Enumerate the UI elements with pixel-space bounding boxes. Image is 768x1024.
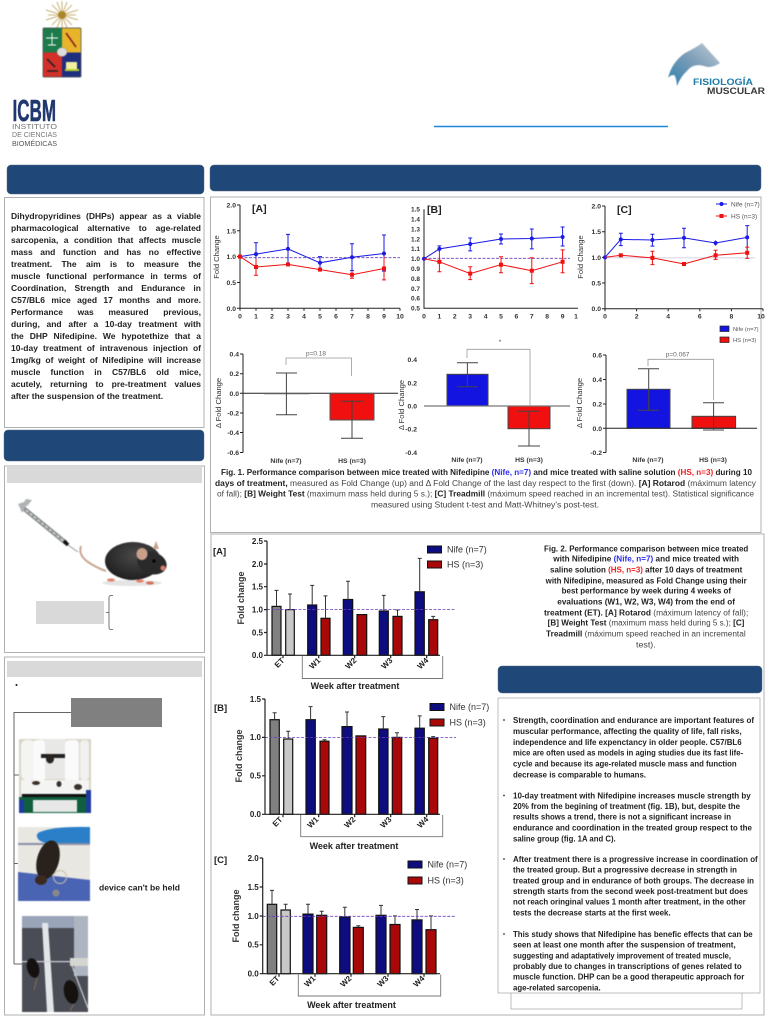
panel: performance tests <box>4 657 204 1015</box>
text block: abstract: pharmacological alternative to age-related <box>11 223 201 233</box>
logo: Fisiologia Muscular: MUSCULAR <box>707 86 765 97</box>
bar chart B: W2 <box>343 815 358 830</box>
bar chart C: [C] <box>214 855 227 866</box>
delta bar chart C: 0.4 <box>593 377 602 384</box>
line chart A: 4 <box>302 314 306 320</box>
bar chart B: W3 <box>379 815 394 830</box>
line chart B: 3 <box>468 314 472 320</box>
bar chart A: W4 <box>416 656 431 671</box>
line chart C: 0.0 <box>592 306 601 313</box>
caption: figure 2: [B] Weight Test (maximum mass held during 5 s.); [C] <box>548 618 745 628</box>
dark gray box <box>71 698 162 727</box>
line chart A: 8 <box>366 314 370 320</box>
conclusion bullet 3: not reach oringinal values 1 month after treatment, in the other <box>513 897 746 907</box>
conclusion bullet 2: 20% from the begining of treatment (fig. 1B), but, despite the <box>513 801 740 811</box>
bar chart C: 2.0 <box>248 854 259 863</box>
line chart A: 1.5 <box>227 228 236 235</box>
conclusion bullet 1: independence and life expenctancy in older people. C57/BL6 <box>513 737 742 747</box>
caption: figure 1 <box>215 468 756 510</box>
caption: figure 2: best performance by week during 4 weeks of <box>562 586 731 596</box>
conclusion bullet 4: This study shows that Nifedipine has benefic effects that can be <box>513 929 753 939</box>
line chart A: 5 <box>318 314 322 320</box>
delta bar chart C: Nife (n=7) <box>632 457 664 464</box>
bar chart C <box>214 854 467 1010</box>
bar chart C: ET <box>268 974 281 988</box>
delta bar chart C: HS (n=3) <box>699 457 727 464</box>
conclusion bullet 2 <box>503 791 752 843</box>
panel: treatment method <box>4 466 204 652</box>
text block: abstract: 10-day treatment of intravenous injection of <box>11 343 201 353</box>
conclusion bullet 4: seen at least one month after the suspension of treatment, <box>513 940 736 950</box>
conclusion bullet 1: Strength, coordination and endurance are important features of <box>513 715 754 725</box>
bar chart C: W2 <box>339 974 354 989</box>
legend: delta bars: Nife (n=7) <box>733 327 759 333</box>
caption: figure 1: measured using Student t-test and Matt-Whitney's post-test. <box>371 500 599 510</box>
photo: treadmill <box>22 916 88 1012</box>
bar chart B <box>214 695 489 851</box>
conclusion bullet 1 <box>503 715 754 779</box>
logo: Fisiologia Muscular <box>668 43 765 97</box>
delta bar chart C: -0.2 <box>590 450 602 457</box>
line chart A: 0 <box>238 314 242 320</box>
delta bar chart B <box>397 339 570 464</box>
heading bar: results <box>210 165 761 191</box>
bar chart A: 0.5 <box>252 628 264 637</box>
bar chart A: W1 <box>308 656 323 671</box>
bar chart A: Fold change <box>236 571 246 625</box>
text block: abstract: after the suspension of the treatment. <box>11 391 163 401</box>
line chart B: 1 <box>574 314 578 320</box>
legend: delta bars: HS (n=3) <box>733 338 756 344</box>
caption: figure 2: with Nifedipine, measured as Fold Change using their <box>545 576 747 586</box>
text block: abstract: acutely, returning to pre-treatment values <box>11 379 201 389</box>
caption: figure 2: evaluations (W1, W2, W3, W4) from the end of <box>557 598 735 606</box>
caption: figure 2: Fig. 2. Performance comparison between mice treated <box>544 544 749 554</box>
line chart C: 4 <box>666 314 670 320</box>
legend: line chart: HS (n=3) <box>731 213 757 220</box>
bar chart C: 1.0 <box>248 912 259 921</box>
logo: ICBM institute: ICBM <box>12 93 56 128</box>
bar chart B: Week after treatment <box>310 841 398 851</box>
line chart B: 1 <box>438 314 442 320</box>
panel: figure 1 <box>210 197 765 532</box>
caption: figure 2: with Nifedipine (Nife, n=7) and mice treated with <box>552 554 739 564</box>
bar chart C: Week after treatment <box>307 1000 396 1010</box>
conclusion bullet 3: strength starts from the second week post-treatment but does <box>513 886 748 896</box>
bar chart B: 1.0 <box>250 733 262 742</box>
delta bar chart A: -0.6 <box>227 450 239 457</box>
line chart C: 0.5 <box>592 280 601 288</box>
delta bar chart B: * <box>499 339 502 346</box>
bar chart C: Nife (n=7) <box>428 860 467 870</box>
bar chart A: 1.5 <box>252 582 264 592</box>
bar chart C: W1 <box>303 974 318 989</box>
text block: abstract: C57/BL6 mice aged 17 months and more. <box>11 295 201 305</box>
line chart B: 1.4 <box>411 216 420 224</box>
text block: abstract: the DHP Nifedipine. We hypotethize that a <box>11 331 201 341</box>
delta bar chart B: 0.4 <box>408 357 417 364</box>
heading bar: conclusions <box>498 666 762 693</box>
conclusion bullet 3 <box>503 854 758 917</box>
caption: figure 1: Fig. 1. Performance comparison between mice treated with Nifedipine (Nife, n=7) and mice treated with saline solution (HS, n=3) during 10 <box>221 468 753 477</box>
text block: abstract: Performance was measured previous, <box>11 307 201 317</box>
line chart B: 2 <box>453 314 457 320</box>
delta bar chart B: Nife (n=7) <box>451 457 483 464</box>
delta bar chart A: 0.0 <box>230 391 239 398</box>
legend: line chart <box>716 201 760 220</box>
bar chart C: 0.5 <box>248 941 259 950</box>
text block: abstract: mass and function and has no effective <box>11 247 201 257</box>
panel: figure 2 <box>211 534 764 1015</box>
text block: abstract: 1mg/kg of weight of Nifedipine will increase <box>11 355 201 365</box>
line chart B: 0.7 <box>411 286 420 293</box>
line chart B: [B] <box>427 204 442 216</box>
line chart C: 10 <box>757 314 765 320</box>
line chart B: 1.3 <box>411 226 420 233</box>
bar chart B: HS (n=3) <box>450 718 486 728</box>
line chart A: 7 <box>350 314 354 320</box>
bar chart B: 0.0 <box>250 810 262 819</box>
bar chart B: 0.5 <box>250 772 262 781</box>
delta bar chart A <box>214 350 398 465</box>
delta bar chart C: 0.0 <box>593 426 602 433</box>
conclusion bullet 3: After treatment there is a progressive increase in coordination of <box>513 854 758 864</box>
conclusion bullet 4: muscle function. DHP can be a good therapeutic approach for <box>513 971 745 981</box>
brace <box>106 596 113 630</box>
bar chart A: 2.5 <box>252 537 264 546</box>
conclusion bullet 4: age-related sarcopenia. <box>513 983 601 993</box>
delta bar chart A: Nife (n=7) <box>270 458 302 465</box>
conclusion bullet 1: mice are often used as models in aging studies due its fast life- <box>513 748 743 758</box>
line chart A: 2.0 <box>227 202 236 210</box>
line chart B: 0.6 <box>411 296 420 303</box>
gray label box <box>36 601 104 624</box>
label: device text: device can't be held <box>99 884 180 892</box>
line chart C: 6 <box>698 314 702 320</box>
delta bar chart A: -0.2 <box>227 410 239 418</box>
delta bar chart A: -0.4 <box>227 430 239 437</box>
bar chart C: 0.0 <box>248 970 259 978</box>
conclusion bullet 1: cycle and because its age-related muscle mass and function <box>513 758 737 768</box>
bar chart A: W2 <box>344 656 359 671</box>
line chart B: 1.0 <box>411 256 420 263</box>
caption: figure 2: test). <box>636 640 656 650</box>
line chart A: 2 <box>270 314 274 320</box>
bullet <box>16 684 18 686</box>
conclusion bullet 2: results shows a trend, there is not a significant increase in <box>513 812 731 822</box>
caption: figure 1: days of treatment, measured as Fold Change (up) and Δ Fold Change of the last day respect to the first (down). [A] Rotarod (máximum latency <box>215 479 756 488</box>
line chart A: 3 <box>286 314 290 320</box>
bar chart A: Week after treatment <box>311 681 399 691</box>
conclusion bullet 3: treated group and in endurance of both groups. The decrease in <box>513 875 754 885</box>
line chart C: 8 <box>730 314 734 320</box>
bar chart A: 2.0 <box>252 560 264 569</box>
line chart A: 0.5 <box>227 280 236 287</box>
caption: figure 2: treatment (ET). [A] Rotarod (máximum latency of fall); <box>544 608 748 618</box>
panel: abstract <box>4 198 204 428</box>
line chart B: 5 <box>499 314 503 320</box>
caption: figure 2 <box>544 544 749 650</box>
bar chart A: W3 <box>380 656 395 671</box>
bar chart B: W1 <box>306 815 321 830</box>
bar chart C: Fold change <box>231 889 241 943</box>
line chart A: 9 <box>382 314 386 320</box>
connector lines <box>14 712 71 964</box>
line chart A: 0.0 <box>227 306 236 313</box>
line chart C: Fold Change <box>576 235 585 279</box>
logo: ICBM institute: BIOMÉDICAS <box>12 139 57 148</box>
conclusion bullet 3: tests the decrease starts at the first week. <box>513 907 671 917</box>
bar chart A: HS (n=3) <box>447 560 483 570</box>
bar chart B: 1.5 <box>250 695 262 704</box>
line chart A <box>212 202 404 320</box>
bar chart B: Nife (n=7) <box>450 702 489 712</box>
delta bar chart A: HS (n=3) <box>338 458 366 465</box>
line chart B: 4 <box>484 314 488 320</box>
line chart B: 6 <box>515 314 519 320</box>
delta bar chart C <box>575 352 757 464</box>
line chart B: 0.9 <box>411 266 420 273</box>
line chart C: 2.0 <box>592 204 601 210</box>
delta bar chart C: p=0.067 <box>666 352 690 358</box>
delta bar chart B: 0.2 <box>408 380 417 388</box>
bar chart A <box>213 537 487 691</box>
bar chart B: Fold change <box>234 729 244 783</box>
delta bar chart B: Δ Fold Change <box>397 380 406 430</box>
line chart B: 0.8 <box>411 276 420 283</box>
line chart B: 1.5 <box>411 207 420 214</box>
line chart C: 1.5 <box>592 229 601 236</box>
conclusion bullet 2: 10-day treatment with Nifedipine increases muscle strength by <box>513 791 751 801</box>
heading bar: abstract <box>7 165 204 194</box>
line chart C: 0 <box>603 314 607 320</box>
bar chart C: W4 <box>412 974 427 989</box>
conclusion bullet 4: suggesting and adaptatively improvement of treated muscle, <box>513 950 731 960</box>
line chart A: 1 <box>254 314 258 320</box>
text block: abstract <box>11 211 201 401</box>
line chart B <box>411 204 578 320</box>
text block: abstract: sarcopenia, a condition that affects muscle <box>11 235 201 245</box>
bar chart A: 1.0 <box>252 605 264 614</box>
line chart C: 1.0 <box>592 255 601 262</box>
line chart B: 0.5 <box>411 306 420 313</box>
text block: abstract: Dihydropyridines (DHPs) appear as a viable <box>11 211 201 221</box>
bar chart A: 0.0 <box>252 651 264 660</box>
delta bar chart A: Δ Fold Change <box>214 378 223 428</box>
delta bar chart B: 0.0 <box>408 404 417 410</box>
line chart B: 1.1 <box>411 246 420 253</box>
small empty box <box>511 985 742 1009</box>
conclusion bullet 1: muscular performance, affecting the quality of life, fall risks, <box>513 726 742 736</box>
line chart B: 1.2 <box>411 236 420 243</box>
icon: syringe <box>18 499 78 552</box>
line chart A: Fold Change <box>212 235 221 279</box>
bar chart C: HS (n=3) <box>428 876 464 886</box>
caption: figure 2: Treadmill (máximum speed reached in an incremental <box>546 630 746 638</box>
delta bar chart B: HS (n=3) <box>515 457 543 464</box>
caption: figure 2: saline solution (HS, n=3) after 10 days of treatment <box>550 566 743 574</box>
delta bar chart C: 0.6 <box>593 352 602 360</box>
line chart A: 1.0 <box>227 254 236 261</box>
bar chart C: W3 <box>376 974 391 989</box>
heading bar: methods <box>4 430 204 461</box>
delta bar chart A: 0.4 <box>230 352 239 358</box>
photo: weight test <box>18 827 90 901</box>
delta bar chart B: -0.2 <box>405 426 417 434</box>
bar chart B: [B] <box>214 703 227 714</box>
icon: mouse <box>80 541 170 586</box>
conclusion bullet 3: the treated group. But a progressive decrease in strength in <box>513 865 737 875</box>
logo: ICBM institute <box>12 93 58 148</box>
bar chart B: ET <box>271 815 284 829</box>
text block: abstract: treatment. The aim is to measure the <box>11 259 201 269</box>
conclusion bullet 4: probably due to changes in transcriptions of genes related to <box>513 961 742 971</box>
line chart A: 10 <box>396 314 404 320</box>
bar chart A: Nife (n=7) <box>447 544 487 554</box>
logo: university crest <box>43 1 81 77</box>
logo: Fisiologia Muscular: FISIOLOGÍA <box>693 77 753 88</box>
caption: figure 1: of fall); [B] Weight Test (maximum mass held during 5 s.); [C] Treadmill (máximum speed reached in an incremental test). Statistical significance <box>217 490 754 498</box>
line chart C: [C] <box>617 204 632 216</box>
photo: rotarod <box>19 739 91 813</box>
line chart B: 9 <box>561 314 565 320</box>
logo: ICBM institute: DE CIENCIAS <box>12 132 57 139</box>
treatment heading bar <box>7 467 202 483</box>
bar chart B: W4 <box>416 815 431 830</box>
text block: abstract: muscle function in C57/BL6 old mice, <box>11 367 201 377</box>
delta bar chart C: Δ Fold Change <box>575 378 584 428</box>
delta bar chart A: p=0.18 <box>306 350 326 358</box>
line chart B: 0 <box>422 314 426 320</box>
legend: line chart: Nife (n=7) <box>731 201 760 208</box>
bar chart C: 1.5 <box>248 883 259 892</box>
conclusion bullet 1: decrease is comparable to humans. <box>513 769 646 779</box>
bar chart A: ET <box>273 656 286 670</box>
line chart C: 2 <box>635 314 639 320</box>
delta bar chart B: -0.4 <box>405 450 417 457</box>
logo: ICBM institute: INSTITUTO <box>12 124 58 131</box>
line chart C <box>576 201 765 320</box>
line chart B: 8 <box>545 314 549 320</box>
delta bar chart A: 0.2 <box>230 371 239 378</box>
conclusion bullet 2: saline group (fig. 1A and C). <box>513 833 616 843</box>
conclusion bullet 2: endurance and coordination in the treated group respect to the <box>513 822 752 832</box>
tests heading bar <box>7 661 202 677</box>
conclusion bullet 4 <box>503 929 753 993</box>
legend: delta bars <box>720 326 759 344</box>
text block: abstract: Coordination, Strength and Endurance in <box>11 283 201 293</box>
text block: abstract: during, and after a 10-day treatment with <box>11 319 201 329</box>
text block: abstract: muscle functional performance in terms of <box>11 271 201 281</box>
line chart B: 7 <box>530 314 534 320</box>
panel: conclusions <box>498 698 760 993</box>
line chart A: [A] <box>252 203 267 215</box>
contact link underline <box>434 126 668 128</box>
delta bar chart C: 0.2 <box>593 402 602 408</box>
line chart A: 6 <box>334 314 338 320</box>
bar chart A: [A] <box>213 546 226 558</box>
